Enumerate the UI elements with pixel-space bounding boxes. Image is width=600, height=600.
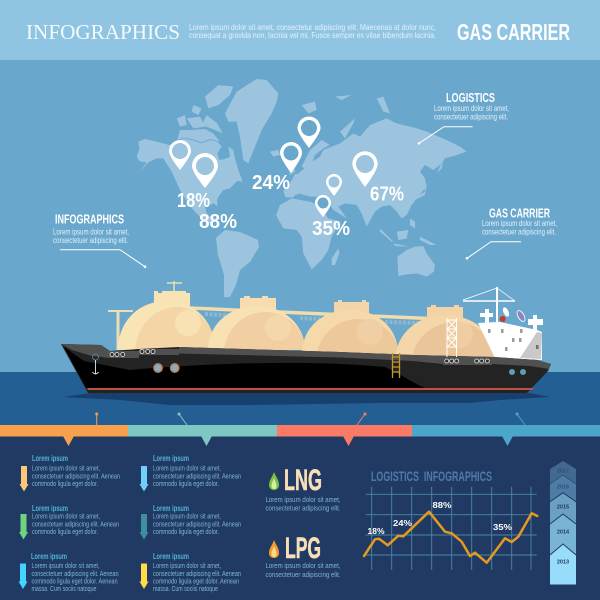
map pins	[169, 116, 378, 217]
chart labels: 35%	[493, 522, 512, 532]
map percentages: 35%	[312, 218, 350, 240]
list item 4: Lorem ipsum dolor sit amet,	[153, 464, 221, 472]
map percentages: 18%	[177, 190, 210, 212]
year arrow stack	[550, 461, 576, 584]
hull	[61, 344, 551, 393]
line chart	[364, 468, 537, 570]
callout: logistics	[418, 90, 509, 145]
gas tank 4	[395, 305, 495, 358]
gas tank 2	[208, 296, 305, 350]
chart labels: 88%	[432, 500, 452, 510]
markers above category bars	[95, 412, 525, 425]
list item 3: commodo ligula eget dolor. Aenean	[32, 576, 118, 586]
list item 2: Lorem ipsum dolor sit amet,	[32, 512, 100, 520]
map percentages: 24%	[252, 172, 290, 194]
chart labels	[368, 500, 512, 536]
category bars	[0, 425, 600, 446]
callout: logistics: LOGISTICS	[446, 90, 495, 105]
gas carrier ship	[61, 281, 551, 393]
anchor	[92, 354, 98, 374]
list item 4: commodo ligula eget dolor.	[153, 479, 219, 488]
cranes	[108, 281, 182, 350]
deck rings	[110, 350, 489, 363]
callout: gas carrier: Lorem ipsum dolor sit amet,	[482, 219, 557, 228]
ship crane	[463, 287, 515, 322]
list item 4	[140, 453, 241, 492]
list item 2: Lorem ipsum	[32, 503, 68, 513]
list item 2: consectetuer adipiscing elit. Aenean	[32, 520, 119, 528]
LNG block: LNG	[284, 464, 322, 497]
year arrow stack: 2014	[557, 530, 570, 536]
map percentages: 67%	[370, 184, 404, 206]
list item 5: Lorem ipsum	[153, 503, 189, 513]
chart line	[364, 512, 537, 563]
header banner	[0, 0, 600, 60]
list item 3: consectetuer adipiscing elit. Aenean	[32, 569, 118, 578]
list item 6: Lorem ipsum	[153, 551, 189, 561]
deck bands	[61, 344, 551, 369]
list item 1: commodo ligula eget dolor.	[32, 479, 98, 488]
chart labels: 24%	[393, 518, 412, 528]
map percentages	[177, 172, 404, 240]
list item 4: Lorem ipsum	[153, 453, 189, 463]
list item 6: Lorem ipsum dolor sit amet,	[153, 561, 221, 570]
callout: gas carrier: consectetuer adipiscing elit.	[482, 228, 556, 236]
list item 6: commodo ligula eget dolor. Aenean	[153, 576, 239, 586]
LPG block: consectetuer adipiscing elit.	[266, 570, 340, 579]
chart labels: 18%	[368, 526, 385, 536]
list item 5: commodo ligula eget dolor.	[153, 527, 219, 536]
year arrow stack: 2013	[557, 560, 569, 566]
LNG block: consectetuer adipiscing elit.	[266, 504, 340, 512]
list item 5: consectetuer adipiscing elit. Aenean	[153, 520, 241, 528]
list item 3: Lorem ipsum	[31, 551, 67, 561]
list item 6	[140, 551, 241, 593]
walkway	[190, 308, 440, 323]
LNG block: Lorem ipsum dolor sit amet,	[266, 495, 340, 504]
yellow ladder	[392, 353, 400, 378]
icon: orange flame	[269, 540, 279, 558]
list item 2: commodo ligula eget dolor.	[32, 527, 98, 536]
map percentages: 88%	[199, 211, 237, 233]
year arrow stack: 2016	[557, 484, 569, 490]
portholes	[154, 364, 179, 372]
header text block: consequat a gravida non, lacinia vel mi. Fusce semper ex vitae bibendum lacinia.	[189, 31, 436, 40]
white ladder	[447, 318, 456, 357]
list item 3: Lorem ipsum dolor sit amet,	[32, 561, 100, 570]
list item 1: consectetuer adipiscing elit. Aenean	[32, 472, 120, 480]
callout: infographics: Lorem ipsum dolor sit amet,	[53, 228, 129, 236]
list item 1: Lorem ipsum dolor sit amet,	[32, 464, 100, 472]
list item 2	[19, 503, 119, 540]
header text block: Lorem ipsum dolor sit amet, consectetur adipiscing elit. Maecenas at dolor nunc,	[189, 23, 436, 32]
LPG block	[266, 532, 340, 579]
year arrow stack: 2017	[557, 468, 569, 474]
list item 6: massa. Cum sociis natoque	[153, 584, 218, 593]
superstructure	[478, 306, 543, 360]
list item 3: massa. Cum sociis natoque	[32, 584, 96, 593]
list item 6: consectetuer adipiscing elit. Aenean	[153, 569, 241, 578]
sea	[0, 372, 600, 425]
header title: INFOGRAPHICS	[26, 20, 180, 44]
LNG block	[266, 464, 340, 512]
list item 4: consectetuer adipiscing elit. Aenean	[153, 472, 241, 480]
callout: logistics: consectetuer adipiscing elit.	[434, 112, 508, 122]
callout: infographics	[53, 212, 146, 268]
chart title: LOGISTICS INFOGRAPHICS	[371, 468, 492, 484]
red waterline	[87, 388, 534, 390]
callout: infographics: INFOGRAPHICS	[55, 212, 124, 226]
world map	[137, 79, 467, 297]
icon: green flame	[269, 472, 279, 490]
list item 5: Lorem ipsum dolor sit amet,	[153, 512, 221, 520]
gas tank 3	[302, 300, 398, 354]
callout: gas carrier: GAS CARRIER	[489, 206, 550, 220]
callout: logistics: Lorem ipsum dolor sit amet,	[434, 104, 509, 113]
list item 1: Lorem ipsum	[32, 453, 68, 463]
header text block	[189, 23, 436, 40]
callout: gas carrier	[466, 206, 557, 260]
ship shadow	[63, 393, 550, 405]
LPG block: LPG	[285, 532, 321, 565]
LPG block: Lorem ipsum dolor sit amet,	[266, 561, 340, 570]
hull black shade	[64, 347, 425, 388]
list item 3	[18, 551, 118, 593]
gas tank 1	[118, 291, 215, 350]
list item 5	[140, 503, 241, 540]
callout: infographics: consectetuer adipiscing elit.	[53, 236, 128, 245]
list item 1	[20, 453, 120, 492]
year arrow stack: 2015	[557, 504, 569, 510]
